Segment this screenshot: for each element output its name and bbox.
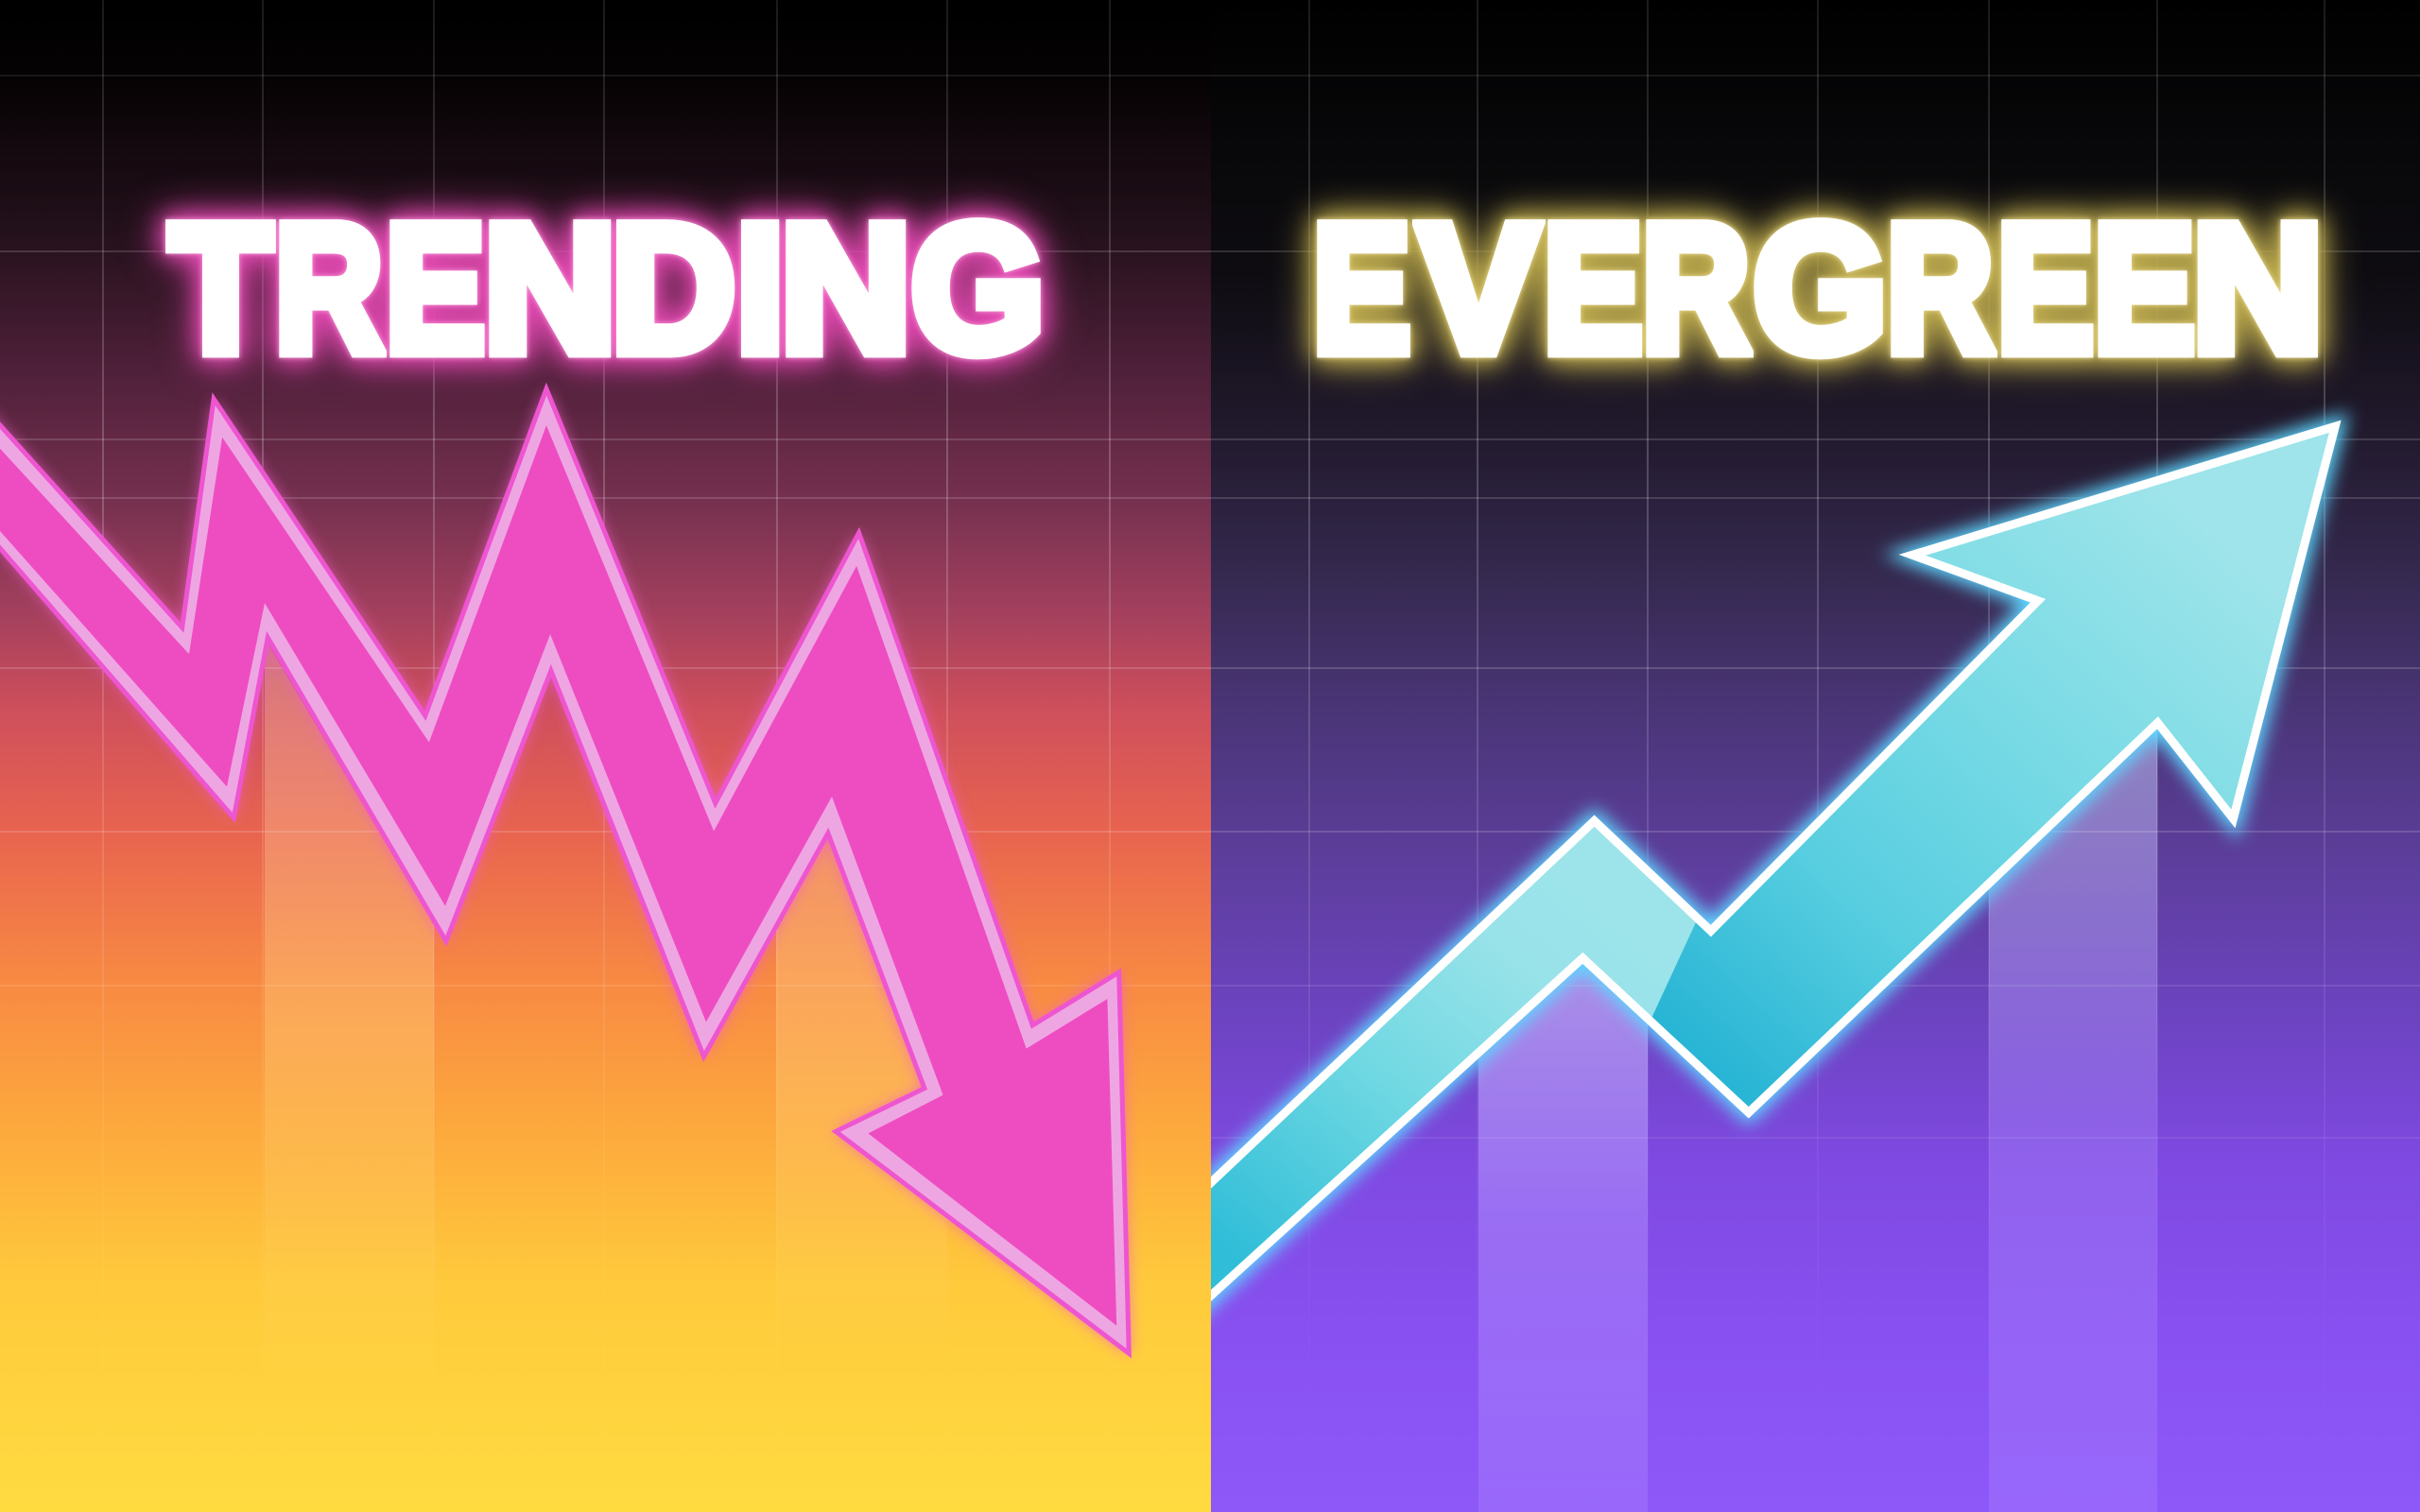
- bar: trending backdrop bar one: [265, 638, 434, 1512]
- heading: TRENDING: N: [484, 188, 616, 389]
- heading: EVERGREEN: R: [1641, 188, 1749, 389]
- heading: TRENDING: E: [386, 188, 485, 389]
- heading: TRENDING: D: [612, 188, 735, 389]
- arrow: evergreen rising cyan zigzag: [1187, 426, 2335, 1317]
- heading: TRENDING: N: [781, 188, 911, 389]
- heading: TRENDING: I: [736, 188, 784, 389]
- heading: EVERGREEN: G: [1754, 188, 1887, 389]
- heading: EVERGREEN: V: [1419, 188, 1538, 389]
- panel: trending background: [0, 0, 1211, 1512]
- heading: TRENDING: T: [170, 188, 270, 389]
- panel: evergreen background: [1211, 0, 2420, 1512]
- heading: EVERGREEN: R: [1887, 188, 1993, 389]
- heading: TRENDING: R: [275, 188, 383, 389]
- heading: TRENDING: G: [911, 188, 1045, 389]
- heading: EVERGREEN: E: [2094, 188, 2194, 389]
- heading: EVERGREEN: E: [1997, 188, 2094, 389]
- heading: EVERGREEN: E: [1544, 188, 1642, 389]
- heading: EVERGREEN: E: [1313, 188, 1410, 389]
- bar: trending backdrop bar two: [776, 833, 946, 1512]
- bar: evergreen backdrop bar two: [1989, 723, 2157, 1512]
- bar: evergreen backdrop bar one: [1478, 958, 1648, 1512]
- arrow: trending falling pink zigzag: [0, 389, 1129, 1353]
- heading: EVERGREEN: N: [2192, 188, 2323, 389]
